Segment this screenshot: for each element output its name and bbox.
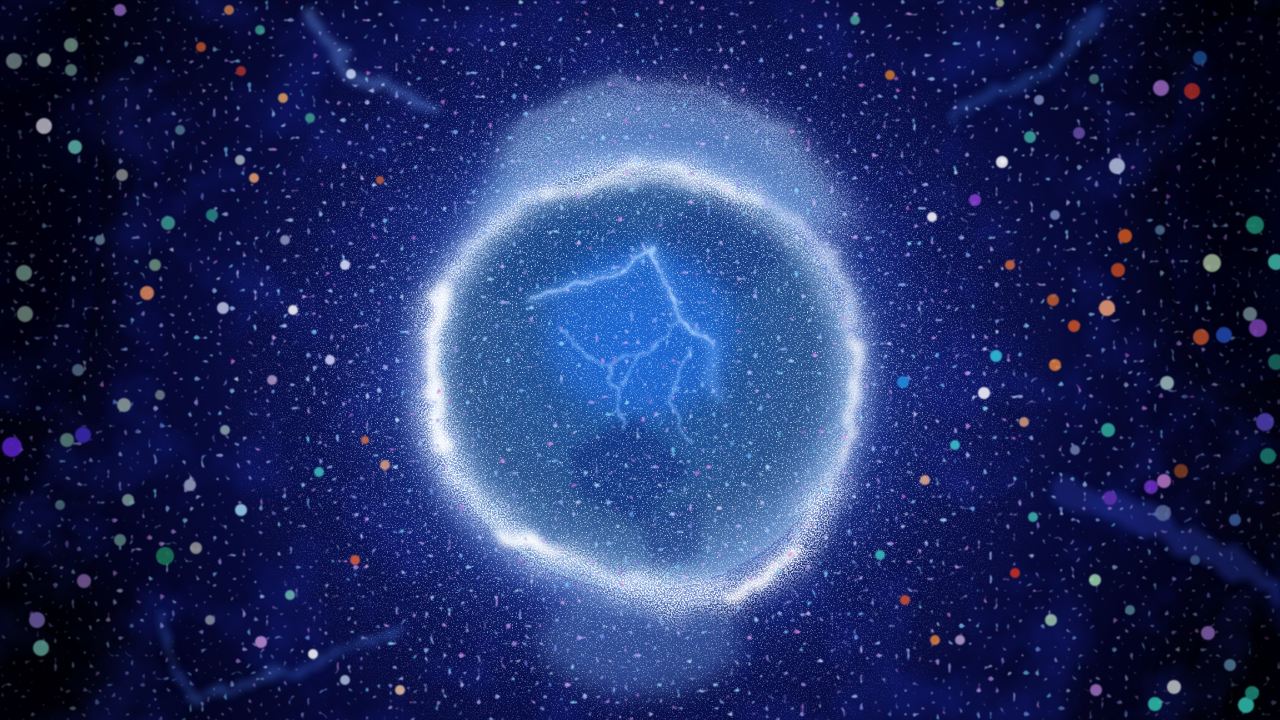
soft halo behind the ring [310, 20, 970, 720]
coloured bokeh particles: left field [2, 4, 405, 695]
outer shell arc [510, 85, 790, 130]
ring body [431, 180, 857, 597]
coloured bokeh particles: right field [850, 0, 1280, 713]
lightning streaks in the core [530, 245, 720, 440]
lower plume [540, 585, 740, 695]
ring interior [428, 166, 852, 590]
dark facets inside the ring [490, 190, 790, 570]
ring outer glow [426, 164, 854, 592]
bright blue centre glow [545, 245, 735, 415]
ring bright sections [431, 285, 445, 445]
glowing particle ring [426, 85, 857, 600]
fine dust speckle [220, 0, 1060, 720]
upper shell of the nebula [470, 85, 850, 240]
dense white grain along the ring [401, 61, 885, 636]
